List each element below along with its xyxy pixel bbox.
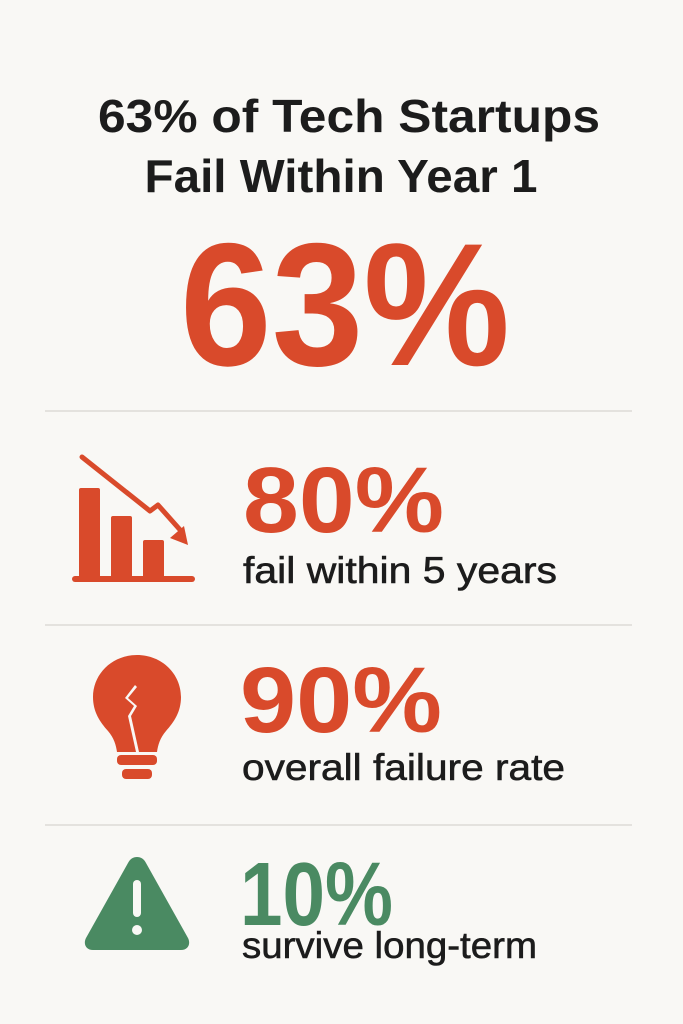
stat: 80% <box>243 448 557 591</box>
stat: 10%: 10% <box>240 845 393 945</box>
stat: 10%: survive long-term <box>242 925 537 966</box>
title: Fail Within Year 1 <box>144 150 538 202</box>
headline stat 63%: 63% <box>180 208 510 403</box>
icon: cracked light bulb <box>93 655 181 779</box>
stat: 80%: fail within 5 years <box>243 550 557 591</box>
stat: 90%: 90% <box>240 648 442 752</box>
stat: 80%: 80% <box>243 448 444 552</box>
stat: 90%: overall failure rate <box>242 747 565 788</box>
icon: warning triangle <box>85 857 189 950</box>
stat: 90% <box>240 648 565 788</box>
stat: 10% <box>240 845 537 966</box>
title <box>98 90 600 202</box>
title: 63% of Tech Startups <box>98 90 600 142</box>
icon: declining bar chart <box>72 457 195 582</box>
